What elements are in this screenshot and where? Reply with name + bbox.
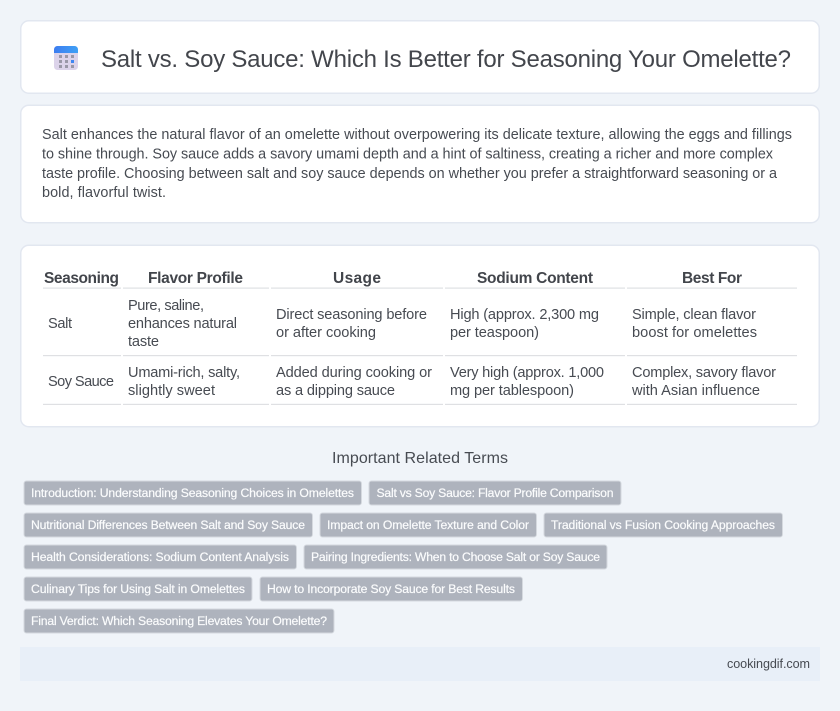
- tag: flavor profile: Salt vs Soy Sauce: Flavor Profile Comparison: [376, 486, 614, 500]
- tag: nutritional differences: [24, 513, 312, 537]
- intro paragraph: [42, 127, 792, 201]
- panel: title header: [21, 21, 819, 93]
- tag: texture and color: [320, 513, 536, 537]
- table row: soy sauce: with Asian influence: [631, 383, 760, 399]
- table row: soy sauce: [48, 365, 776, 399]
- table header: Flavor Profile: [148, 270, 243, 287]
- table row: soy sauce: Added during cooking or: [276, 365, 432, 381]
- table row: soy sauce: Umami-rich, salty,: [128, 365, 240, 381]
- tag: soy sauce results: How to Incorporate Soy Sauce for Best Results: [267, 582, 515, 596]
- table row: salt: Pure, saline,: [128, 298, 204, 314]
- table row: soy sauce: as a dipping sauce: [276, 383, 395, 399]
- panel: introduction: [21, 105, 819, 223]
- tag: culinary tips: Culinary Tips for Using Salt in Omelettes: [31, 582, 245, 596]
- icon: calendar: [54, 46, 78, 70]
- tag: texture and color: Impact on Omelette Texture and Color: [327, 518, 529, 532]
- table header: Sodium Content: [477, 270, 593, 287]
- table row: soy sauce: mg per tablespoon): [450, 383, 574, 399]
- intro paragraph: to shine through. Soy sauce adds a savory umami depth and a hint of saltiness, creating a richer and more complex: [42, 146, 774, 162]
- related terms tags: [24, 481, 782, 633]
- tag: pairing ingredients: [304, 545, 607, 569]
- table row: salt: boost for omelettes: [632, 325, 757, 341]
- table header: Usage: [333, 270, 381, 287]
- table row: salt: [48, 298, 757, 350]
- table row: salt: enhances natural: [128, 316, 237, 332]
- table row: soy sauce: Very high (approx. 1,000: [450, 365, 604, 381]
- tag: culinary tips: [24, 577, 252, 601]
- tag: health considerations: Health Considerations: Sodium Content Analysis: [31, 550, 289, 564]
- table row: salt: Salt: [48, 316, 72, 332]
- tag: health considerations: [24, 545, 296, 569]
- table row: salt: High (approx. 2,300 mg: [450, 307, 599, 323]
- tag: flavor profile: [369, 481, 621, 505]
- tag: traditional vs fusion: [544, 513, 782, 537]
- intro paragraph: Salt enhances the natural flavor of an omelette without overpowering its delicate texture, allowing the eggs and fillings: [42, 127, 792, 143]
- title: Salt vs. Soy Sauce: Which Is Better for Seasoning Your Omelette?: [101, 46, 791, 73]
- intro paragraph: bold, flavorful twist.: [42, 185, 166, 201]
- table row: soy sauce: Complex, savory flavor: [632, 365, 776, 381]
- tag: soy sauce results: [260, 577, 522, 601]
- table row: salt: or after cooking: [276, 325, 376, 341]
- table row: salt: per teaspoon): [450, 325, 539, 341]
- table row: soy sauce: Soy Sauce: [48, 374, 114, 390]
- footer: [20, 647, 820, 681]
- tag: introduction: Introduction: Understanding Seasoning Choices in Omelettes: [31, 486, 354, 500]
- tag: traditional vs fusion: Traditional vs Fusion Cooking Approaches: [551, 518, 775, 532]
- tag: final verdict: Final Verdict: Which Seasoning Elevates Your Omelette?: [31, 614, 327, 628]
- table row: salt: Simple, clean flavor: [632, 307, 756, 323]
- table row: salt: Direct seasoning before: [276, 307, 427, 323]
- table header: [44, 270, 742, 287]
- table header: Seasoning: [44, 270, 119, 287]
- heading: important related terms: Important Related Terms: [332, 450, 508, 467]
- footer source text: cookingdif.com: [727, 657, 810, 671]
- tag: final verdict: [24, 609, 334, 633]
- tag: nutritional differences: Nutritional Differences Between Salt and Soy Sauce: [31, 518, 305, 532]
- tag: introduction: [24, 481, 362, 505]
- intro paragraph: taste profile. Choosing between salt and soy sauce depends on whether you prefer a straightforward seasoning or a: [42, 166, 777, 182]
- table row: soy sauce: slightly sweet: [128, 383, 215, 399]
- tag: pairing ingredients: Pairing Ingredients: When to Choose Salt or Soy Sauce: [311, 550, 600, 564]
- table row: salt: taste: [128, 334, 159, 350]
- panel: comparison table: [21, 245, 819, 427]
- table header: Best For: [682, 270, 742, 287]
